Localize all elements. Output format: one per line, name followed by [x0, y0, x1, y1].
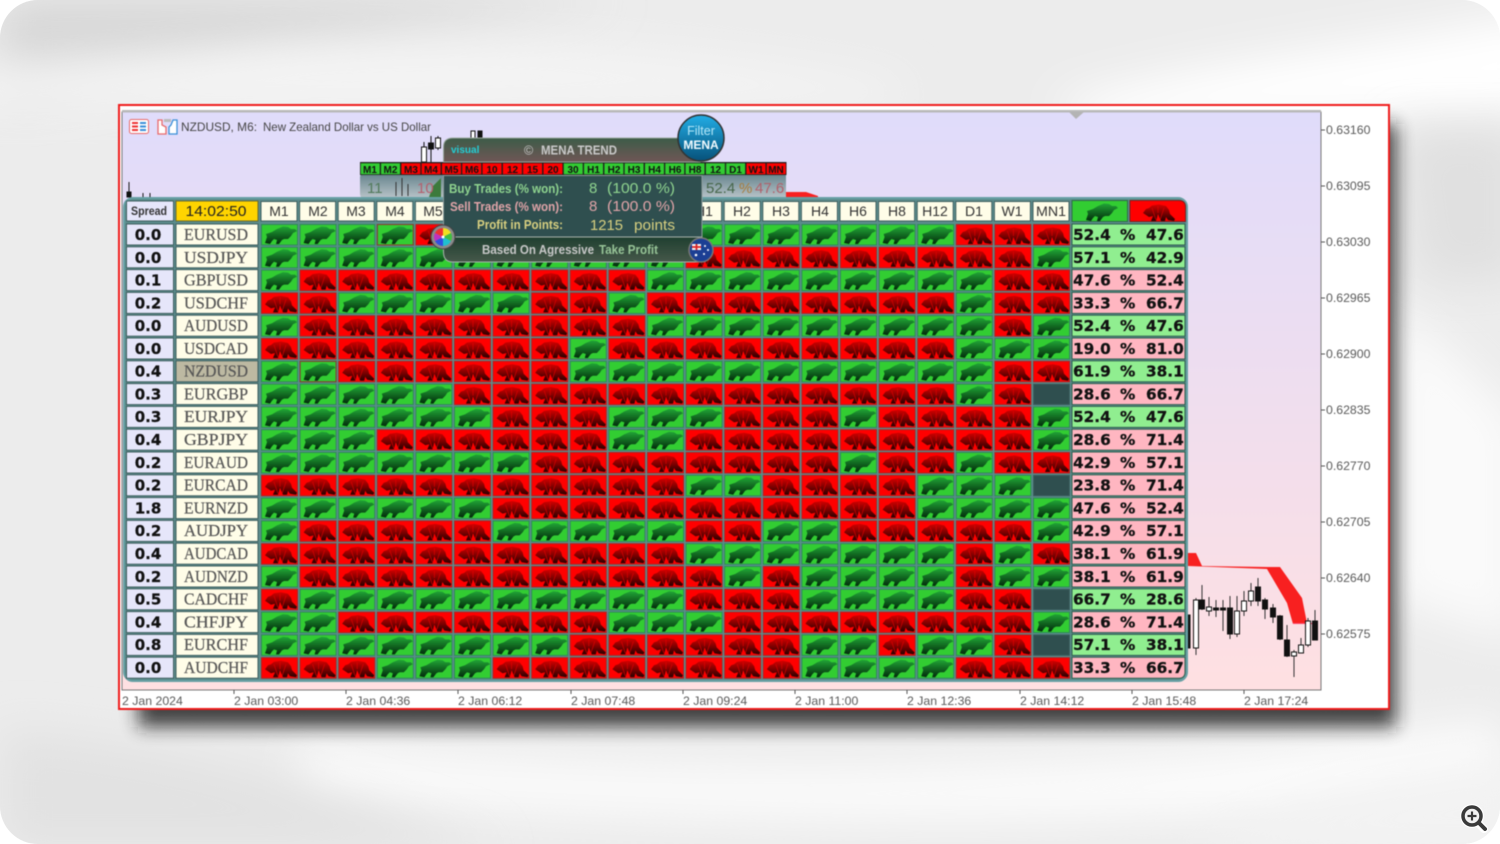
- side summary strip: left: 10: [417, 180, 434, 197]
- timeframe status strip: H3: [628, 165, 641, 176]
- spread column: 0.2: [135, 476, 161, 494]
- symbol column: EURCHF: [184, 635, 248, 654]
- side summary strip: right: [698, 172, 818, 199]
- timeframe labels: W1: [1002, 203, 1023, 219]
- row: USDCHF: [262, 293, 1070, 313]
- symbol column: NZDUSD: [184, 362, 248, 380]
- percentage column: %: [1120, 454, 1135, 472]
- row: USDCAD: [262, 338, 1070, 359]
- symbol column: EURAUD: [184, 453, 248, 472]
- price axis: 0.62835: [1326, 403, 1371, 417]
- symbol column: EURGBP: [184, 384, 248, 404]
- percentage column: 33.3: [1073, 659, 1111, 677]
- timeframe status strip: H8: [689, 165, 702, 176]
- timeframe labels: M3: [346, 203, 366, 219]
- timeframe labels: M10: [497, 203, 525, 219]
- price axis: 0.62965: [1326, 291, 1371, 305]
- price axis: 0.63160: [1326, 123, 1371, 137]
- percentage column: %: [1120, 340, 1135, 358]
- row: EURUSD: [262, 224, 1070, 245]
- spread column: 0.4: [135, 614, 161, 632]
- price axis: 0.62900: [1326, 347, 1371, 361]
- percentage column: %: [1120, 249, 1135, 267]
- timeframe labels: H12: [922, 203, 948, 219]
- panel: trade statistics: Buy Trades (% won):: [449, 182, 563, 196]
- percentage column: 71.4: [1146, 614, 1184, 632]
- timeframe status strip: MN: [768, 165, 784, 176]
- percentage column: %: [1120, 431, 1135, 449]
- row: EURCHF: [262, 635, 1070, 655]
- percentage column: [1072, 224, 1185, 678]
- time axis: 2 Jan 03:00: [234, 694, 298, 708]
- percentage column: 42.9: [1073, 454, 1111, 472]
- time axis: 2 Jan 14:12: [1020, 694, 1084, 708]
- symbol column: AUDCHF: [184, 658, 248, 677]
- candlesticks: lower right: [1187, 578, 1318, 677]
- symbol column: AUDJPY: [184, 521, 248, 540]
- panel: trade statistics: 1215: [590, 217, 623, 234]
- row: EURNZD: [262, 498, 1070, 519]
- timeframe labels: M20: [612, 203, 640, 219]
- row: GBPUSD: [262, 270, 1070, 291]
- candles: upper left: [127, 131, 482, 197]
- percentage column: 33.3: [1073, 294, 1111, 312]
- price axis: [1321, 123, 1371, 641]
- panel: MENA TREND header: [444, 138, 700, 162]
- button: Filter MENA: Filter: [687, 124, 715, 138]
- percentage column: %: [1120, 476, 1135, 494]
- timeframe status strip: 12: [507, 165, 518, 176]
- percentage column: 23.8: [1073, 476, 1111, 494]
- symbol column: CADCHF: [184, 590, 248, 608]
- panel: MENA TREND header: visual: [451, 145, 480, 156]
- percentage column: 66.7: [1073, 590, 1111, 608]
- percentage column: 28.6: [1073, 614, 1111, 632]
- percentage column: 66.7: [1146, 386, 1184, 404]
- percentage column: 61.9: [1146, 545, 1184, 563]
- spread column: 0.3: [135, 408, 161, 426]
- panel: take profit footer: Take Profit: [599, 243, 659, 257]
- panel: trade statistics: points: [634, 217, 675, 234]
- symbol column: CHFJPY: [184, 612, 248, 632]
- spread column: 0.8: [135, 636, 161, 654]
- percentage column: 38.1: [1073, 568, 1111, 586]
- timeframe status strip: 10: [486, 165, 498, 176]
- symbol column: GBPUSD: [184, 270, 248, 290]
- spread column: 0.0: [135, 340, 161, 358]
- symbol column: GBPJPY: [184, 430, 248, 449]
- price axis: 0.62705: [1326, 515, 1371, 529]
- dashboard table: [124, 198, 1187, 681]
- spread column: 0.2: [135, 522, 161, 540]
- timeframe status strip: H6: [669, 165, 682, 176]
- clock: [176, 201, 258, 221]
- time axis: 2 Jan 12:36: [907, 694, 971, 708]
- timeframe status strip: M3: [404, 165, 418, 176]
- percentage column: 42.9: [1146, 249, 1184, 267]
- symbol column: EURNZD: [184, 498, 248, 518]
- frame drop shadow: [138, 124, 1396, 727]
- percentage column: %: [1120, 614, 1135, 632]
- timeframe labels: H2: [733, 203, 751, 219]
- button: Filter MENA: MENA: [683, 138, 719, 152]
- spread column: 0.1: [135, 272, 161, 290]
- row: AUDUSD: [262, 316, 1070, 336]
- row: USDJPY: [262, 247, 1070, 268]
- percentage column: %: [1120, 317, 1135, 335]
- time axis: 2 Jan 04:36: [346, 694, 410, 708]
- spread column: 0.0: [135, 659, 161, 677]
- price axis: 0.62770: [1326, 459, 1371, 473]
- percentage column: 38.1: [1073, 545, 1111, 563]
- timeframe status strip: M5: [445, 165, 459, 176]
- timeframe labels: D1: [965, 203, 983, 219]
- side summary strip: right: 47.6: [755, 180, 784, 197]
- button: Filter MENA: [678, 115, 724, 161]
- percentage column: 47.6: [1146, 408, 1184, 426]
- symbol column: [176, 224, 258, 678]
- timeframe labels: [261, 202, 1069, 221]
- time axis: 2 Jan 2024: [122, 694, 183, 708]
- timeframe labels: M4: [385, 203, 405, 219]
- symbol column: AUDUSD: [184, 316, 248, 335]
- timeframe status strip: W1: [748, 165, 764, 176]
- timeframe labels: M2: [308, 203, 328, 219]
- timeframe status strip: 20: [547, 165, 559, 176]
- percentage column: 61.9: [1146, 568, 1184, 586]
- icon: Australia flag: [689, 238, 713, 262]
- timeframe labels: M30: [651, 203, 679, 219]
- timeframe labels: H6: [849, 203, 867, 219]
- row: AUDNZD: [262, 566, 1070, 587]
- table frame: [124, 198, 1187, 681]
- percentage column: 47.6: [1146, 317, 1184, 335]
- percentage column: 52.4: [1073, 317, 1111, 335]
- side summary strip: right: %: [739, 180, 752, 197]
- panel: trade statistics: [444, 176, 702, 237]
- row: AUDCAD: [262, 544, 1070, 564]
- spread column: 0.2: [135, 454, 161, 472]
- panel: trade statistics: (100.0 %): [607, 198, 675, 215]
- percentage column: 47.6: [1073, 500, 1111, 518]
- icon: documents: [158, 119, 177, 134]
- percentage column: %: [1120, 659, 1135, 677]
- percentage column: 66.7: [1146, 294, 1184, 312]
- row: AUDCHF: [262, 658, 1070, 678]
- timeframe labels: M15: [574, 203, 602, 219]
- percentage column: 71.4: [1146, 431, 1184, 449]
- timeframe status strip: H1: [587, 165, 600, 176]
- panel: trade statistics: Sell Trades (% won):: [450, 200, 563, 214]
- symbol column: EURUSD: [184, 225, 248, 244]
- percentage column: %: [1120, 226, 1135, 244]
- time axis: 2 Jan 15:48: [1132, 694, 1196, 708]
- chart title: [130, 119, 431, 134]
- panel: trade statistics: Profit in Points:: [477, 218, 563, 232]
- symbol column: EURJPY: [184, 407, 248, 426]
- percentage column: 66.7: [1146, 659, 1184, 677]
- panel: MENA TREND header: MENA TREND: [541, 144, 617, 158]
- percentage column: %: [1120, 568, 1135, 586]
- timeframe status strip: H2: [608, 165, 621, 176]
- percentage column: %: [1120, 636, 1135, 654]
- percentage column: %: [1120, 294, 1135, 312]
- row: EURAUD: [262, 452, 1070, 473]
- bear total header: [1130, 200, 1186, 222]
- percentage column: 81.0: [1146, 340, 1184, 358]
- symbol column: USDJPY: [184, 248, 248, 267]
- row: CADCHF: [262, 589, 1070, 610]
- spread column: 0.4: [135, 545, 161, 563]
- timeframe labels: M1: [269, 203, 289, 219]
- chart plot area: [122, 112, 1321, 690]
- panel: MENA TREND header: ©: [524, 144, 534, 158]
- time axis: [122, 690, 1308, 708]
- timeframe labels: H3: [772, 203, 790, 219]
- row: GBPJPY: [262, 430, 1070, 450]
- percentage column: %: [1120, 386, 1135, 404]
- timeframe status strip: 15: [527, 165, 538, 176]
- bull total header: [1072, 200, 1128, 222]
- spread column: 0.0: [135, 317, 161, 335]
- timeframe labels: M5: [423, 203, 443, 219]
- spread column: 0.4: [135, 431, 161, 449]
- clock: 14:02:50: [186, 203, 246, 220]
- timeframe status strip: D1: [729, 165, 742, 176]
- spread header: [126, 201, 174, 221]
- timeframe labels: MN1: [1036, 203, 1066, 219]
- price axis: 0.62640: [1326, 571, 1371, 585]
- percentage column: %: [1120, 408, 1135, 426]
- timeframe status strip: H4: [648, 165, 661, 176]
- percentage column: %: [1120, 590, 1135, 608]
- row: EURCAD: [262, 475, 1070, 496]
- percentage column: 61.9: [1073, 362, 1111, 380]
- percentage column: 57.1: [1146, 454, 1184, 472]
- timeframe labels: M12: [535, 203, 563, 219]
- panel: trade statistics: (100.0 %): [607, 180, 675, 197]
- spread column: 0.5: [135, 590, 161, 608]
- percentage column: 52.4: [1073, 226, 1111, 244]
- timeframe status strip: M4: [424, 165, 438, 176]
- percentage column: 28.6: [1073, 386, 1111, 404]
- row: CHFJPY: [262, 612, 1070, 633]
- chart window: [119, 105, 1389, 709]
- side summary strip: left: [360, 172, 446, 199]
- time axis: 2 Jan 17:24: [1244, 694, 1308, 708]
- timeframe status strip: M1: [363, 165, 377, 176]
- icon: zoom magnifier: [1460, 804, 1485, 829]
- side summary strip: right: 52.4: [706, 180, 735, 197]
- red trend band: [1188, 553, 1307, 624]
- spread header: Spread: [131, 204, 167, 218]
- panel: take profit footer: Based On Agressive: [482, 243, 594, 257]
- percentage column: 38.1: [1146, 636, 1184, 654]
- percentage column: 47.6: [1146, 226, 1184, 244]
- percentage column: 71.4: [1146, 476, 1184, 494]
- spread column: [126, 224, 174, 678]
- time axis: 2 Jan 11:00: [795, 694, 859, 708]
- percentage column: 47.6: [1073, 272, 1111, 290]
- spread column: 0.0: [135, 226, 161, 244]
- timeframe status strip: [360, 162, 786, 176]
- spread column: 0.0: [135, 249, 161, 267]
- spread column: 0.2: [135, 568, 161, 586]
- timeframe status strip: M2: [384, 165, 398, 176]
- panel: trade statistics: 8: [589, 198, 597, 215]
- percentage column: 42.9: [1073, 522, 1111, 540]
- percentage column: 19.0: [1073, 340, 1111, 358]
- percentage column: 52.4: [1146, 500, 1184, 518]
- percentage column: 52.4: [1073, 408, 1111, 426]
- row: AUDJPY: [262, 521, 1070, 541]
- timeframe labels: H1: [695, 203, 713, 219]
- percentage column: 52.4: [1146, 272, 1184, 290]
- signal matrix: bull and bear cells: [262, 224, 1070, 678]
- symbol title text: NZDUSD, M6:: [181, 120, 257, 134]
- time axis: 2 Jan 06:12: [458, 694, 522, 708]
- side summary strip: left: 11: [367, 180, 383, 197]
- percentage column: %: [1120, 272, 1135, 290]
- icon: colour wheel: [431, 225, 455, 249]
- percentage column: 57.1: [1146, 522, 1184, 540]
- timeframe status strip: 12: [710, 165, 721, 176]
- percentage column: 28.6: [1073, 431, 1111, 449]
- row: EURGBP: [262, 384, 1070, 405]
- percentage column: 57.1: [1073, 636, 1111, 654]
- percentage column: %: [1120, 362, 1135, 380]
- symbol column: USDCAD: [184, 339, 248, 358]
- symbol title text: New Zealand Dollar vs US Dollar: [263, 120, 431, 134]
- price axis: 0.62575: [1326, 627, 1371, 641]
- price axis: 0.63095: [1326, 179, 1371, 193]
- timeframe status strip: 30: [567, 165, 579, 176]
- spread column: 1.8: [135, 500, 161, 518]
- symbol column: EURCAD: [184, 476, 248, 494]
- row: EURJPY: [262, 407, 1070, 427]
- icon: list: [130, 120, 148, 134]
- timeframe labels: H8: [888, 203, 906, 219]
- symbol column: AUDCAD: [184, 544, 248, 563]
- time axis: 2 Jan 09:24: [683, 694, 747, 708]
- percentage column: %: [1120, 500, 1135, 518]
- symbol column: USDCHF: [184, 294, 248, 312]
- panel: take profit footer: [444, 237, 702, 262]
- table header row: [126, 200, 1186, 222]
- row: NZDUSD: [262, 361, 1070, 382]
- timeframe labels: M6: [462, 203, 482, 219]
- timeframe status strip: M6: [465, 165, 479, 176]
- percentage column: 38.1: [1146, 362, 1184, 380]
- panel: trade statistics: 8: [589, 180, 597, 197]
- spread column: 0.3: [135, 386, 161, 404]
- spread column: 0.4: [135, 362, 161, 380]
- percentage column: %: [1120, 545, 1135, 563]
- price axis: 0.63030: [1326, 235, 1371, 249]
- percentage column: 57.1: [1073, 249, 1111, 267]
- symbol title text: [181, 120, 431, 134]
- percentage column: %: [1120, 522, 1135, 540]
- symbol column: AUDNZD: [184, 567, 248, 586]
- percentage column: 28.6: [1146, 590, 1184, 608]
- timeframe labels: H4: [811, 203, 829, 219]
- spread column: 0.2: [135, 294, 161, 312]
- time axis: 2 Jan 07:48: [571, 694, 635, 708]
